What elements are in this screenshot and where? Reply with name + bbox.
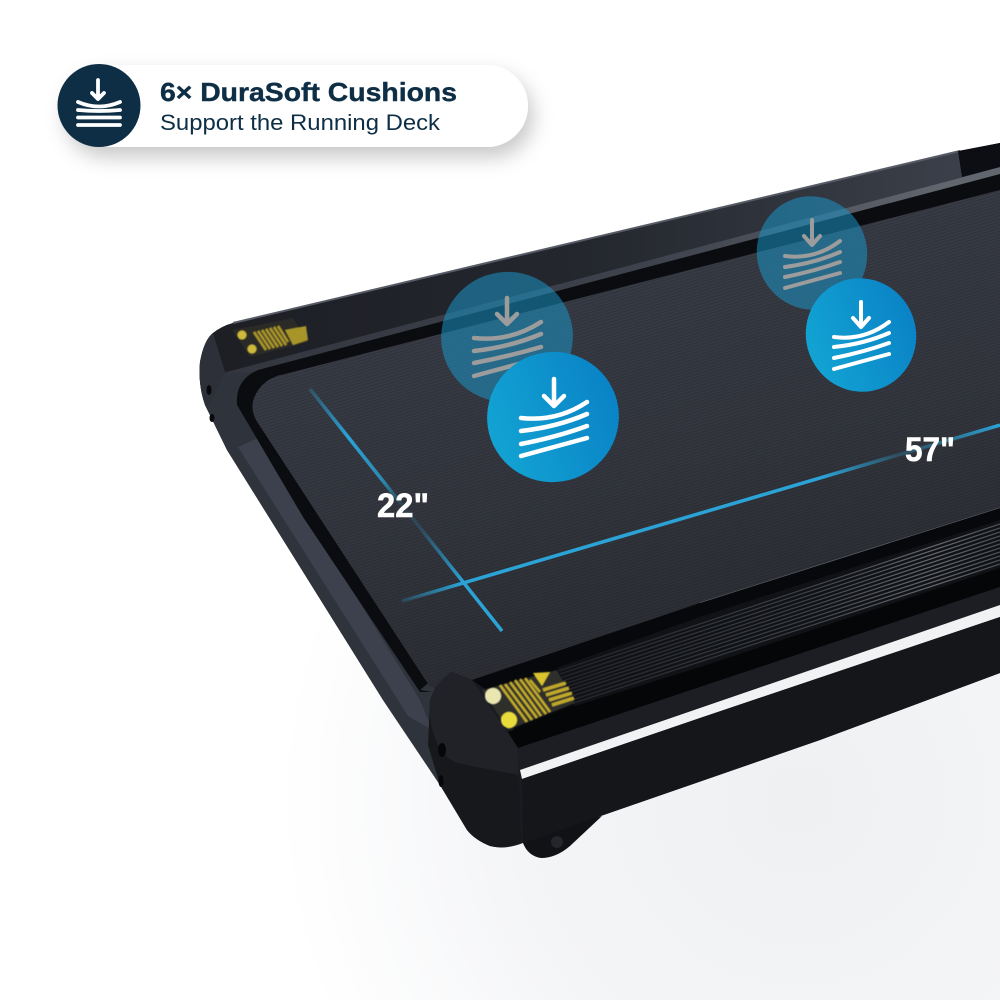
cushion marker: front left [469, 333, 637, 501]
badge subheading: Support the Running Deck [160, 110, 441, 135]
badge heading: 6× DuraSoft Cushions [160, 77, 457, 107]
rear rail [213, 143, 1000, 373]
rear warning label [232, 318, 308, 357]
dimension line: width [310, 389, 502, 631]
rear rail strip [223, 167, 1000, 373]
cushion marker: rear left (faded) [423, 253, 591, 421]
badge icon [58, 64, 140, 147]
rear wheel [523, 816, 602, 858]
front skirt [522, 617, 1000, 843]
cushion marker: front right [790, 263, 932, 407]
rear rail top highlight [233, 151, 960, 323]
white strip [520, 605, 1000, 779]
rail end block [958, 143, 1000, 177]
feature badge [58, 64, 528, 147]
front rail [472, 508, 1000, 770]
label: 22 inch: 22" [377, 487, 429, 525]
rear corner details [200, 333, 225, 422]
front warning label [482, 670, 575, 730]
badge pill [60, 65, 528, 147]
dimension line: length [402, 425, 1000, 601]
cushion marker: rear right (faded) [741, 181, 883, 325]
left rail highlight band [238, 438, 432, 730]
belt front edge [700, 508, 1000, 603]
running belt [252, 190, 1000, 690]
treadmill [200, 143, 1000, 858]
side channel [237, 174, 1000, 692]
deck body [200, 143, 1000, 847]
belt texture [252, 190, 1000, 690]
floor shading [200, 300, 1000, 1000]
label: 57 inch: 57" [905, 431, 955, 469]
front corner cap [428, 672, 521, 847]
left side rail [200, 333, 440, 785]
